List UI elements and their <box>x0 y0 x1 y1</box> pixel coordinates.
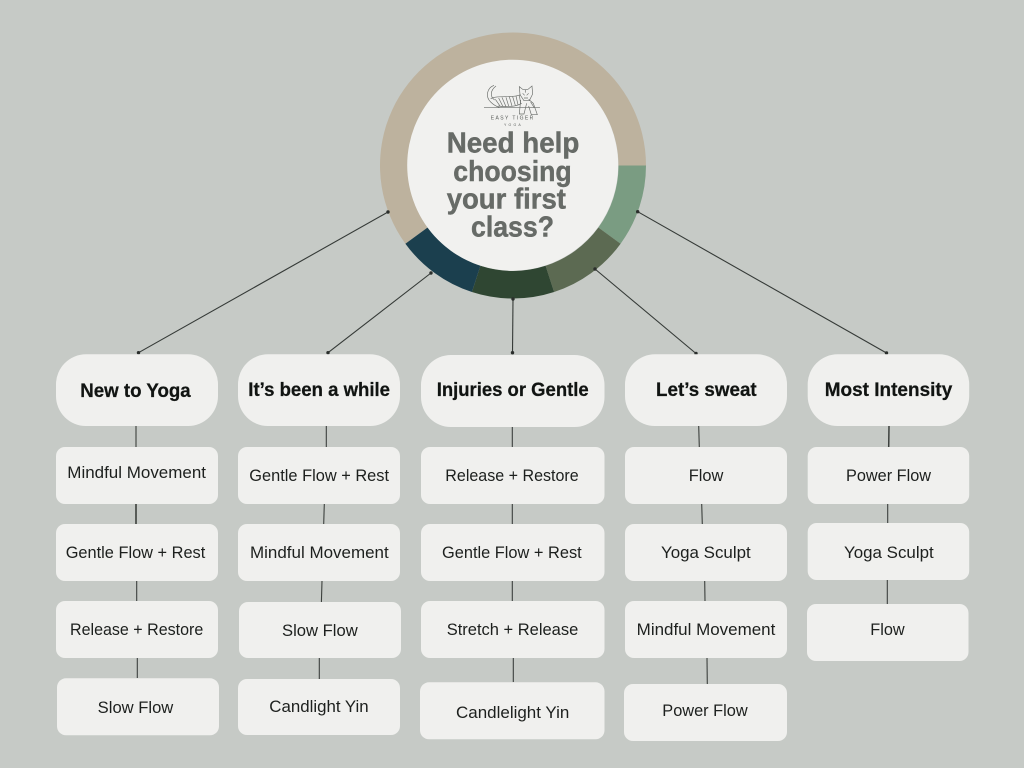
panel: It's been a while column <box>238 354 401 735</box>
panel: Injuries or Gentle column: Candlelight Yin <box>456 704 569 722</box>
logo sub-wordmark: YOGA <box>504 123 521 127</box>
panel: Most Intensity column: Most Intensity <box>825 379 952 401</box>
panel: New to Yoga column: Gentle Flow + Rest <box>66 544 206 562</box>
logo wordmark: EASY TIGER <box>491 115 534 121</box>
panel: Let's sweat column: Yoga Sculpt <box>661 544 751 562</box>
panel: Let's sweat column: Mindful Movement <box>637 621 776 639</box>
panel: It's been a while column: Slow Flow <box>282 622 358 640</box>
centre circle <box>407 60 618 271</box>
panel: Injuries or Gentle column: Injuries or Gentle <box>437 379 589 401</box>
panel: Injuries or Gentle column: Gentle Flow + Rest <box>442 544 582 562</box>
connector lines from ring to category headers <box>138 212 886 354</box>
segmented ring <box>380 33 646 299</box>
panel: It's been a while column: Mindful Movement <box>250 544 389 562</box>
panel: Most Intensity column <box>807 354 969 661</box>
panel: It's been a while column: Candlight Yin <box>269 698 369 716</box>
ring segment: tan <box>380 33 646 244</box>
panel: Let's sweat column: Power Flow <box>662 702 748 720</box>
icon: easy tiger logo <box>484 85 540 115</box>
panel: Injuries or Gentle column <box>420 355 604 739</box>
panel: New to Yoga column: Slow Flow <box>98 699 173 717</box>
panel: Let's sweat column: Flow <box>689 467 723 485</box>
ring segment: sage green <box>598 166 646 244</box>
ring segment: olive <box>546 228 621 292</box>
connector end dots <box>137 210 888 355</box>
ring segment: dark green <box>472 266 554 299</box>
title: class? <box>471 212 554 244</box>
panel: It's been a while column: It’s been a while <box>248 379 390 401</box>
panel: Let's sweat column: Let’s sweat <box>656 379 757 401</box>
panel: Most Intensity column: Yoga Sculpt <box>844 544 934 562</box>
panel: Most Intensity column: Flow <box>870 621 905 639</box>
panel: It's been a while column: Gentle Flow + Rest <box>249 467 389 485</box>
title <box>447 128 579 244</box>
panel: Injuries or Gentle column: Release + Restore <box>445 467 579 485</box>
panel: Injuries or Gentle column: Stretch + Release <box>447 621 578 639</box>
panel: New to Yoga column: Mindful Movement <box>67 464 206 482</box>
ring segment: navy <box>405 228 480 292</box>
panel: Let's sweat column <box>624 354 787 741</box>
panel: New to Yoga column: New to Yoga <box>80 380 191 402</box>
panel: New to Yoga column: Release + Restore <box>70 621 203 639</box>
panel: New to Yoga column <box>56 354 219 735</box>
title: your first <box>447 184 566 216</box>
title: choosing <box>453 156 572 188</box>
title: Need help <box>447 128 579 160</box>
panel: Most Intensity column: Power Flow <box>846 467 931 485</box>
